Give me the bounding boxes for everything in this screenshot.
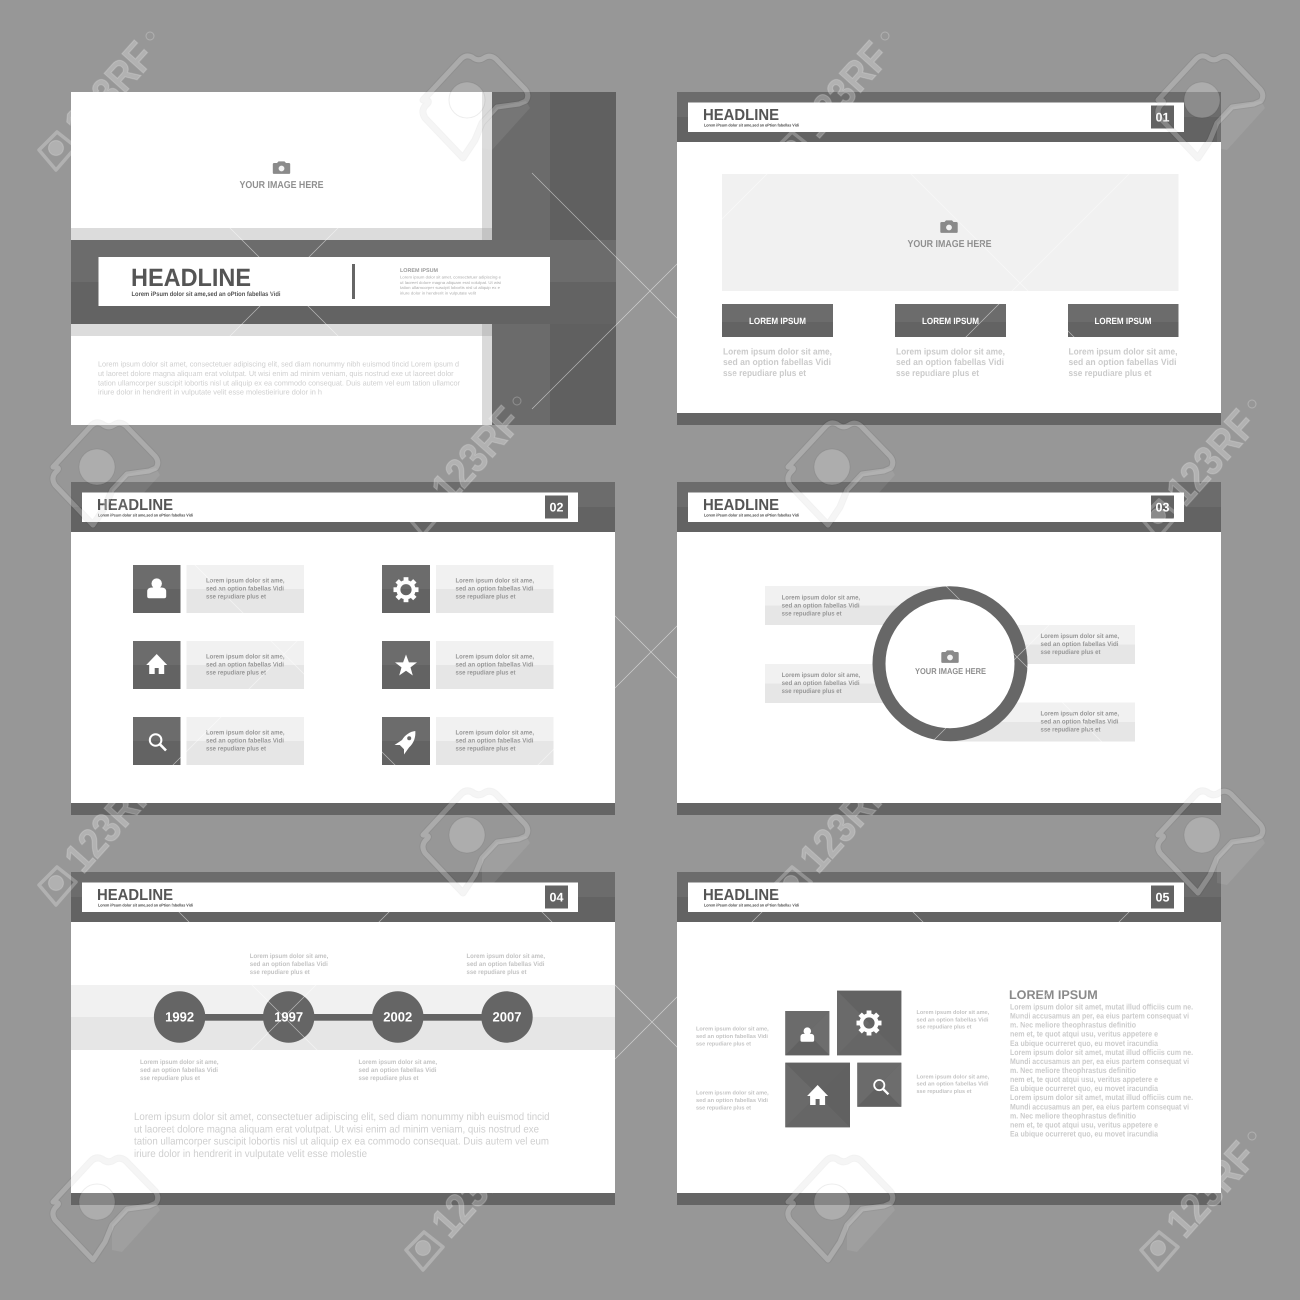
timeline [154, 991, 533, 1043]
body text: Lorem ipsum dolor sit amet, mutat illud officiis cum ne. [1010, 1093, 1193, 1102]
subline: Lorem iPsum dolor sit ame,sed an oPtion fabellas Vidi [704, 512, 799, 518]
slide header 01 [677, 92, 1221, 142]
body text: Ea ubique ocurreret quo, eu movet iracundia [1010, 1130, 1158, 1138]
item: gear: sse repudiare plus et [456, 594, 516, 601]
callout text: bottom left: sed an option fabellas Vidi [782, 680, 860, 687]
column 3: sed an option fabellas Vidi [1068, 357, 1176, 367]
number badge: 01 [1156, 110, 1169, 124]
number badge [1151, 106, 1174, 128]
subline: Lorem iPsum dolor sit ame,sed an oPtion fabellas Vidi [704, 122, 799, 128]
column 1 [722, 304, 833, 378]
note: 2002: Lorem ipsum dolor sit ame, [358, 1059, 437, 1066]
side note: tation ullamcorper suscipit lobortis nisl ut aliquip ex e [400, 285, 501, 290]
column 2 [895, 304, 1006, 378]
headline bar [98, 257, 550, 306]
tile note: top left [696, 1026, 769, 1047]
callout strip: bottom right [950, 702, 1135, 742]
footer bar [677, 1193, 1221, 1205]
tile note: bottom left [696, 1090, 769, 1111]
callout text: bottom right [1040, 711, 1119, 734]
tile: gear [837, 991, 901, 1055]
column 1: LOREM IPSUM [749, 316, 806, 326]
column 2: Lorem ipsum dolor sit ame, [896, 346, 1005, 356]
headline: HEADLINE [97, 887, 173, 904]
item: gear [382, 565, 554, 613]
slide header 05 [677, 872, 1221, 922]
headline: HEADLINE [703, 887, 779, 904]
item: user: sse repudiare plus et [206, 594, 267, 601]
item: rocket: sed an option fabellas Vidi [456, 738, 534, 745]
number badge [545, 496, 568, 518]
side note: LOREM IPSUM [400, 268, 438, 274]
callout text: top right [1040, 633, 1119, 656]
image placeholder: YOUR IMAGE HERE [908, 239, 992, 250]
column 3 [1068, 304, 1178, 378]
tile note: top right: sse repudiare plus et [916, 1024, 972, 1031]
timeline paragraph: tation ullamcorper suscipit lobortis nisl ut aliquip ex ea commodo consequat. Duis autem vel eum [134, 1136, 549, 1148]
milestone 2007 [481, 991, 533, 1043]
item: star: sed an option fabellas Vidi [456, 662, 534, 669]
icon: rocket [394, 731, 415, 754]
callout text: top left [782, 594, 860, 618]
image placeholder [722, 174, 1178, 291]
watermark: logos: 123RF [790, 768, 898, 881]
tile note: bottom left: Lorem ipsum dolor sit ame, [696, 1090, 769, 1097]
tile note: bottom left: sse repudiare plus et [696, 1104, 751, 1111]
panel: slide 02 icon list [71, 482, 615, 815]
icon: user [147, 578, 166, 598]
callout text: bottom left [782, 672, 860, 695]
panel: slide 05 tiles and text [677, 872, 1221, 1205]
divider [352, 264, 355, 299]
cover paragraph: iriure dolor in hendrerit in vulputate velit esse molestieiriure dolor in h [98, 388, 322, 397]
icon: home [807, 1085, 828, 1105]
item: home [133, 641, 304, 689]
icon: gear [394, 577, 418, 602]
tile note: bottom right: sed an option fabellas Vidi [916, 1081, 989, 1088]
slide header 04 [71, 872, 615, 922]
item: rocket [382, 717, 554, 765]
milestone 1992 [154, 991, 205, 1043]
timeline band [71, 985, 615, 1050]
watermark: logos: 123RF [422, 398, 530, 511]
callout text: top left: sse repudiare plus et [782, 610, 842, 618]
column 1: sse repudiare plus et [723, 368, 806, 378]
callout text: top right: Lorem ipsum dolor sit ame, [1040, 633, 1119, 640]
note: 1992: sse repudiare plus et [140, 1075, 201, 1082]
tile note: top right [916, 1009, 990, 1031]
milestone 1992: 1992 [165, 1010, 194, 1024]
tile note: top left: sse repudiare plus et [696, 1040, 751, 1047]
subline: Lorem iPsum dolor sit ame,sed an oPtion fabellas Vidi [98, 902, 193, 908]
body text: nem et, te quot atqui usu, veritus appetere e [1010, 1030, 1158, 1039]
column 2: sse repudiare plus et [896, 368, 979, 378]
item: home: sse repudiare plus et [206, 670, 267, 677]
body text: nem et, te quot atqui usu, veritus appetere e [1010, 1075, 1158, 1084]
tile note: top right: sed an option fabellas Vidi [916, 1016, 989, 1023]
milestone 1997 [263, 991, 314, 1043]
callout text: bottom right: sse repudiare plus et [1040, 727, 1101, 734]
column 3: Lorem ipsum dolor sit ame, [1068, 346, 1178, 356]
body text: Ea ubique ocurreret quo, eu movet iracundia [1010, 1084, 1158, 1093]
cover paragraph: Lorem ipsum dolor sit amet, consectetuer adipiscing elit, sed diam nonummy nibh euismod tincid Lorem ipsum d [98, 360, 459, 369]
column 1: sed an option fabellas Vidi [723, 357, 831, 367]
body text: Mundi accusamus an per, ea eius partem consequat vi [1010, 1012, 1189, 1021]
panel: slide 04 timeline [71, 872, 615, 1205]
note: 2002 [358, 1059, 437, 1082]
item: star [382, 641, 554, 689]
note: 1997: sse repudiare plus et [250, 969, 311, 976]
footer bar [677, 413, 1221, 425]
text heading: LOREM IPSUM [1009, 988, 1098, 1002]
tile note: top right: Lorem ipsum dolor sit ame, [916, 1009, 990, 1016]
item: star: sse repudiare plus et [456, 670, 516, 677]
number badge: 02 [550, 500, 563, 514]
callout text: bottom left: Lorem ipsum dolor sit ame, [782, 672, 860, 679]
item: home: sed an option fabellas Vidi [206, 662, 284, 669]
image caption: YOUR IMAGE HERE [240, 180, 324, 191]
item: search [133, 717, 304, 765]
item: gear: sed an option fabellas Vidi [456, 586, 534, 593]
note: 1992: Lorem ipsum dolor sit ame, [140, 1059, 219, 1066]
headline: HEADLINE [131, 264, 251, 292]
note: 1997: Lorem ipsum dolor sit ame, [250, 953, 329, 960]
callout text: bottom right: Lorem ipsum dolor sit ame, [1040, 711, 1119, 718]
footer bar [71, 803, 615, 815]
circle image placeholder: YOUR IMAGE HERE [915, 666, 986, 676]
sub headline: Lorem iPsum dolor sit ame,sed an oPtion fabellas Vidi [132, 291, 281, 298]
note: 2002: sse repudiare plus et [358, 1075, 419, 1082]
number badge: 04 [550, 890, 563, 904]
note: 2007: sse repudiare plus et [466, 969, 527, 976]
item: rocket: Lorem ipsum dolor sit ame, [456, 730, 534, 737]
body text: Lorem ipsum dolor sit amet, mutat illud officiis cum ne. [1010, 1048, 1193, 1057]
callout text: top right: sed an option fabellas Vidi [1040, 641, 1119, 648]
panel: slide 03 circle diagram [677, 482, 1221, 815]
circle image placeholder [879, 593, 1021, 735]
tile: search [857, 1063, 901, 1107]
tile note: top left: sed an option fabellas Vidi [696, 1033, 768, 1040]
note: 1997: sed an option fabellas Vidi [250, 961, 328, 968]
timeline paragraph: Lorem ipsum dolor sit amet, consectetuer adipiscing elit, sed diam nonummy nibh euismod tincid [134, 1111, 550, 1123]
side note [400, 268, 502, 295]
icon: camera [273, 161, 290, 174]
headline: HEADLINE [703, 497, 779, 514]
slide header 03 [677, 482, 1221, 532]
body text: m. Nec meliore theophrastus definitio [1010, 1066, 1136, 1075]
callout text: top left: sed an option fabellas Vidi [782, 602, 860, 610]
tile note: bottom left: sed an option fabellas Vidi [696, 1097, 768, 1104]
icon: search [874, 1080, 888, 1094]
panel: cover slide [71, 92, 616, 425]
side note: Lorem ipsum dolor sit amet, consectetuer adipiscing e [400, 274, 502, 280]
callout strip: top left [765, 586, 950, 625]
column 1: Lorem ipsum dolor sit ame, [723, 346, 832, 356]
icon: home [146, 654, 167, 674]
body text: Lorem ipsum dolor sit amet, mutat illud officiis cum ne. [1010, 1002, 1193, 1012]
slide header 02 [71, 482, 615, 532]
note: 2007: Lorem ipsum dolor sit ame, [466, 953, 545, 960]
number badge: 03 [1156, 500, 1169, 514]
milestone 1997: 1997 [274, 1010, 303, 1024]
icon: user [800, 1027, 814, 1042]
number badge [1151, 886, 1174, 908]
item: search: Lorem ipsum dolor sit ame, [206, 730, 285, 737]
item: gear: Lorem ipsum dolor sit ame, [456, 578, 534, 585]
callout text: top right: sse repudiare plus et [1040, 649, 1101, 656]
callout strip: bottom left [765, 664, 950, 703]
timeline paragraph: ut laoreet dolore magna aliquam erat volutpat. Ut wisi enim ad minim veniam, quis nostrud exe [134, 1123, 539, 1135]
body text: m. Nec meliore theophrastus definitio [1010, 1021, 1136, 1030]
tile note: bottom right [916, 1073, 990, 1095]
tile: user [785, 1011, 829, 1055]
milestone 2007: 2007 [492, 1010, 522, 1024]
timeline paragraph [134, 1111, 550, 1160]
tile note: top left: Lorem ipsum dolor sit ame, [696, 1026, 769, 1033]
footer bar [677, 803, 1221, 815]
callout text: bottom left: sse repudiare plus et [782, 688, 842, 695]
item: user [133, 565, 304, 613]
callout strip: top right [950, 625, 1135, 664]
side note: ut laoreet dolore magna aliquam erat volutpat. Ut wisi [400, 280, 501, 285]
cover paragraph: ut laoreet dolore magna aliquam erat volutpat. Ut wisi enim ad minim veniam, quis nostrud exe ut laoreet dolor [98, 369, 454, 378]
icon: star [395, 654, 417, 676]
item: rocket: sse repudiare plus et [456, 746, 516, 753]
milestone 2002 [372, 991, 423, 1043]
subline: Lorem iPsum dolor sit ame,sed an oPtion fabellas Vidi [98, 512, 193, 518]
tile note: bottom right: Lorem ipsum dolor sit ame, [916, 1073, 990, 1080]
item: search: sed an option fabellas Vidi [206, 738, 284, 745]
footer bar [71, 1193, 615, 1205]
icon: gear [856, 1010, 882, 1036]
callout text: top left: Lorem ipsum dolor sit ame, [782, 594, 860, 602]
side note: iriure dolor in hendrerit in vulputate velit [400, 290, 477, 295]
cover image placeholder [240, 161, 324, 191]
watermark: logos: 123RF [55, 33, 163, 146]
body text: nem et, te quot atqui usu, veritus appetere e [1010, 1120, 1158, 1129]
headline: HEADLINE [703, 107, 779, 124]
cover paragraph: tation ullamcorper suscipit lobortis nisl ut aliquip ex ea commodo consequat. Duis autem vel eum tation ullamcor [98, 378, 460, 387]
number badge [545, 886, 568, 908]
item: star: Lorem ipsum dolor sit ame, [456, 654, 534, 661]
subline: Lorem iPsum dolor sit ame,sed an oPtion fabellas Vidi [704, 902, 799, 908]
body text: Mundi accusamus an per, ea eius partem consequat vi [1010, 1057, 1189, 1066]
watermark: logos: 123RF [1157, 401, 1265, 514]
column 3: LOREM IPSUM [1094, 316, 1152, 326]
note: 2002: sed an option fabellas Vidi [358, 1067, 437, 1074]
body text: m. Nec meliore theophrastus definitio [1010, 1111, 1136, 1120]
callout text: bottom right: sed an option fabellas Vidi [1040, 719, 1119, 726]
column 2: LOREM IPSUM [922, 316, 979, 326]
note: 2007: sed an option fabellas Vidi [466, 961, 545, 968]
item: home: Lorem ipsum dolor sit ame, [206, 654, 285, 661]
tile: home [785, 1063, 850, 1127]
headline: HEADLINE [97, 497, 173, 514]
column 3: sse repudiare plus et [1068, 368, 1152, 378]
item: user: sed an option fabellas Vidi [206, 586, 284, 593]
panel: slide 01 image and buttons [677, 92, 1221, 425]
note: 1997 [250, 953, 329, 976]
watermark: logos: 123RF [55, 768, 163, 881]
watermark: logos: 123RF [1157, 1133, 1265, 1246]
item: search: sse repudiare plus et [206, 746, 267, 753]
cover paragraph [98, 360, 460, 397]
note: 2007 [466, 953, 545, 976]
watermark: logos: 123RF [422, 1133, 530, 1246]
body text [1010, 1002, 1193, 1138]
watermark: logos: 123RF [790, 33, 898, 146]
tile note: bottom right: sse repudiare plus et [916, 1088, 972, 1095]
item: user: Lorem ipsum dolor sit ame, [206, 578, 285, 585]
body text: Ea ubique ocurreret quo, eu movet iracundia [1010, 1039, 1158, 1048]
icon: search [150, 734, 166, 750]
milestone 2002: 2002 [383, 1010, 412, 1024]
timeline paragraph: iriure dolor in hendrerit in vulputate velit esse molestie [134, 1148, 367, 1160]
note: 1992: sed an option fabellas Vidi [140, 1067, 218, 1074]
number badge: 05 [1156, 890, 1169, 904]
body text: Mundi accusamus an per, ea eius partem consequat vi [1010, 1102, 1189, 1111]
number badge [1151, 496, 1174, 518]
note: 1992 [140, 1059, 219, 1082]
column 2: sed an option fabellas Vidi [896, 357, 1004, 367]
